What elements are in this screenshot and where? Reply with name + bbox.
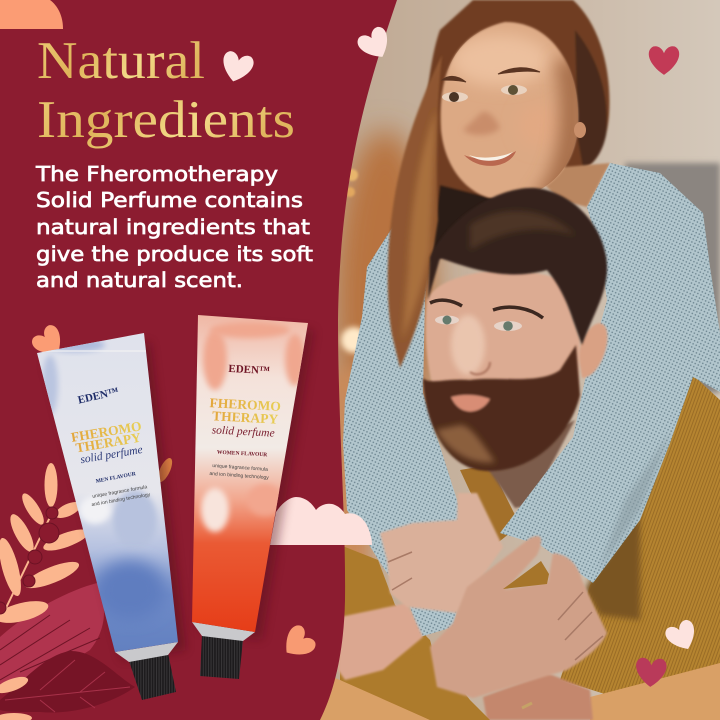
red panel with curved right edge <box>0 0 397 720</box>
body text: Solid Perfume contains <box>36 188 303 212</box>
mustard sweater, left side <box>340 545 478 720</box>
women's tube body <box>192 315 308 632</box>
men's tube cap <box>129 653 176 700</box>
mustard sweater, right side <box>560 375 720 705</box>
body text: natural ingredients that <box>36 215 310 239</box>
men's tube label: THERAPY <box>74 430 142 455</box>
men's tube body <box>37 333 178 652</box>
body text <box>35 162 313 292</box>
berries <box>0 507 59 614</box>
blanket <box>316 663 720 720</box>
man's upper hand <box>380 493 503 613</box>
men's tube label: and ion binding technology <box>91 492 151 508</box>
women's tube label: solid perfume <box>211 424 275 440</box>
big rose leaf <box>0 583 104 690</box>
woman's face <box>441 22 586 200</box>
woman's left hand <box>338 603 423 680</box>
men's tube label <box>70 386 151 508</box>
icon: rose heart lower right <box>635 657 667 688</box>
men's tube label: MEN FLAVOUR <box>95 471 137 485</box>
men's tube label: solid perfume <box>79 444 144 466</box>
icon: heart beside heading <box>218 50 255 85</box>
women's tube label: THERAPY <box>212 408 279 427</box>
dark leaf <box>0 651 135 713</box>
pink cloud shape <box>270 497 372 545</box>
peach foliage <box>0 463 91 720</box>
product: men's tube <box>30 333 186 700</box>
icon: pale heart lower right <box>663 618 701 655</box>
man's beard <box>423 345 580 471</box>
men's tube label: FHEROMO <box>70 418 143 445</box>
product: women's tube <box>192 315 314 679</box>
woman's sweater: shoulder and right arm <box>500 163 720 583</box>
icon: peach heart above left tube <box>29 322 69 362</box>
woman's ring <box>522 703 532 708</box>
photo: couple embracing <box>300 0 720 720</box>
floral decoration, bottom left <box>0 456 175 720</box>
woman's hand at bottom <box>483 673 593 720</box>
peach corner shape <box>0 0 63 29</box>
man's front hand <box>430 536 607 698</box>
heading: Natural Ingredients <box>37 32 295 149</box>
woman's neck <box>530 163 610 207</box>
men's tube label: unique fragrance formula <box>92 484 148 500</box>
women's tube label: EDEN™ <box>228 363 270 377</box>
body text: The Fheromotherapy <box>35 162 278 186</box>
icon: peach heart near tubes <box>277 622 318 664</box>
men's tube neck <box>115 642 178 662</box>
small orange leaf <box>155 456 175 484</box>
body text: give the produce its soft <box>36 242 313 266</box>
women's tube cap <box>200 635 243 679</box>
women's tube label: unique fragrance formula <box>212 463 268 473</box>
women's tube label: WOMEN FLAVOUR <box>217 450 268 458</box>
woman's sweater: left arm <box>343 220 470 637</box>
heading: Natural Ingredients: Ingredients <box>37 91 295 149</box>
men's tube label: EDEN™ <box>77 386 120 407</box>
women's tube label <box>209 363 281 481</box>
sweater cuff under thumb <box>503 561 549 589</box>
icon: heart at panel edge <box>355 24 396 64</box>
body text: and natural scent. <box>36 268 243 292</box>
sweater shading near arm fold <box>598 430 672 572</box>
women's tube label: and ion binding technology <box>209 471 269 481</box>
man's face <box>426 270 580 410</box>
stem <box>5 513 52 610</box>
man's sleeve bottom <box>345 648 490 720</box>
man's hair <box>428 188 607 345</box>
woman's long hair strand <box>388 55 442 368</box>
woman's hair, back <box>420 0 609 262</box>
photo background wall <box>300 0 720 720</box>
icon: rose heart top right <box>649 46 679 75</box>
man's neck and collar <box>460 420 575 545</box>
man's ear <box>578 323 607 378</box>
women's tube neck <box>192 622 255 641</box>
heading: Natural Ingredients: Natural <box>37 32 205 90</box>
women's tube label: FHEROMO <box>209 395 281 414</box>
